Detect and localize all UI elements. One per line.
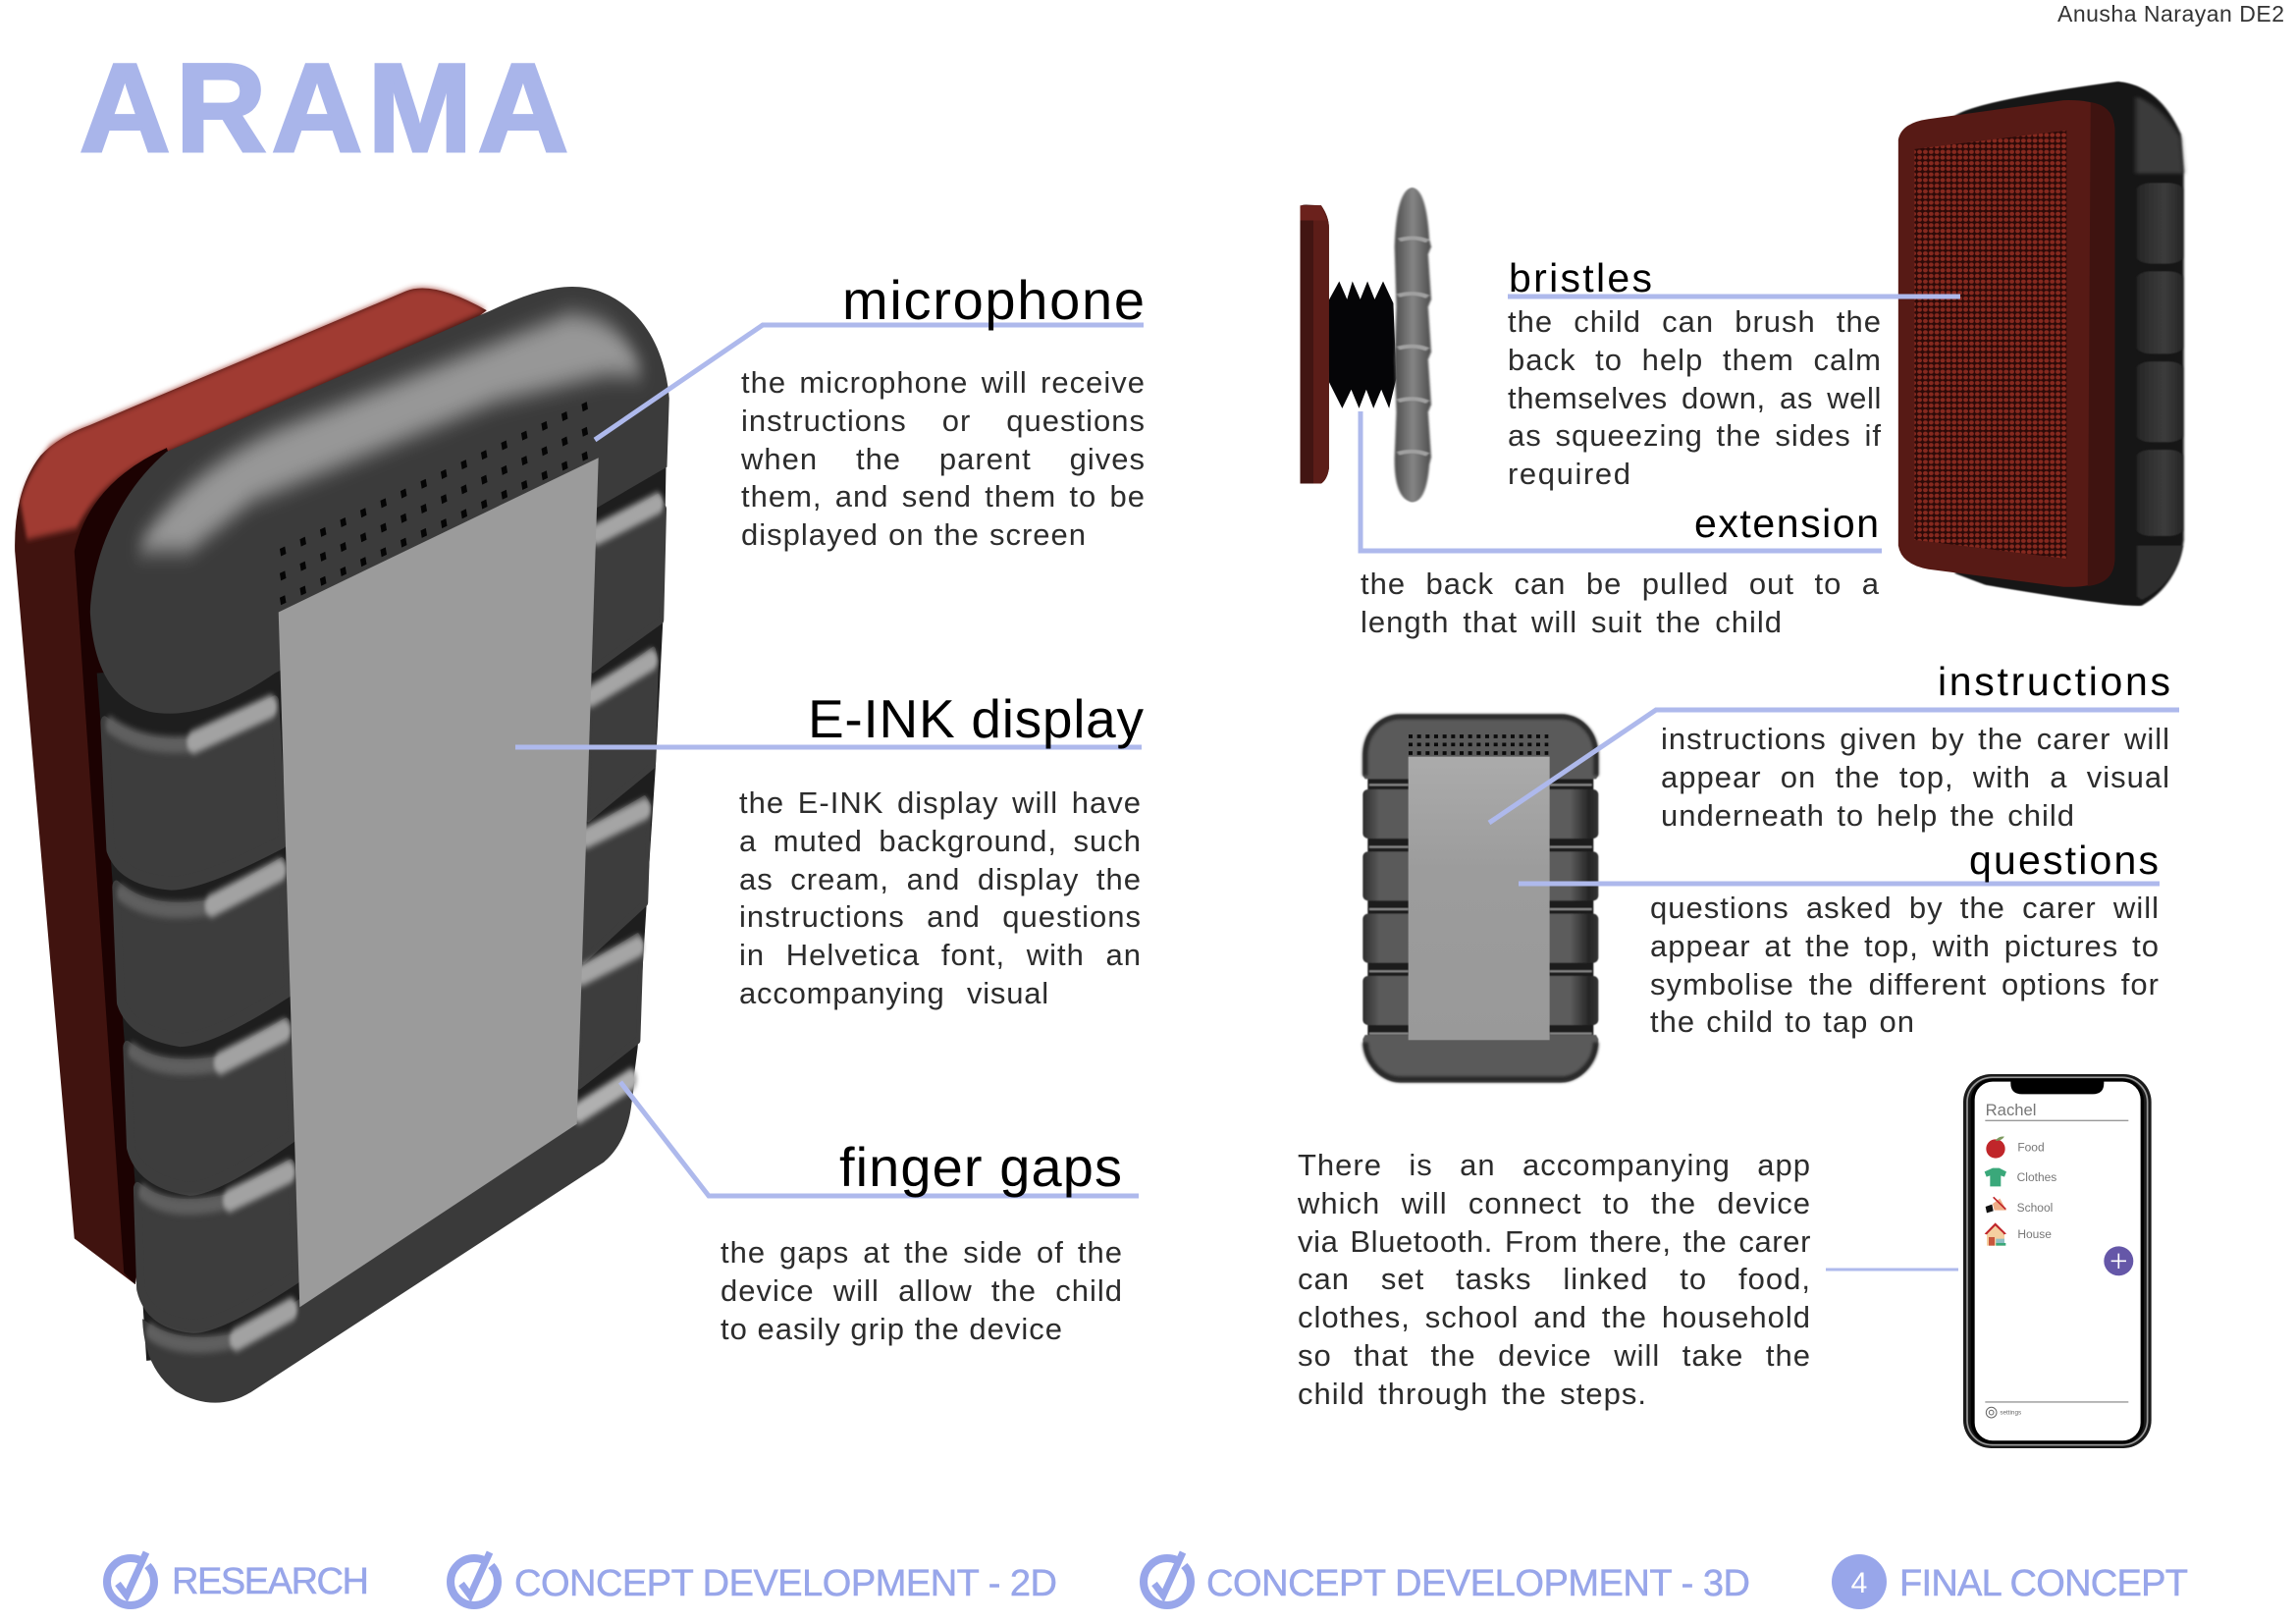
text block: microphone: them, and send them to be	[741, 479, 1146, 514]
callout line: extension	[1361, 411, 1882, 551]
callout line: bristles	[1508, 295, 1960, 298]
text block: finger gaps: the gaps at the side of the	[721, 1235, 1123, 1270]
text block: companion app: via Bluetooth. From there, the carer	[1298, 1224, 1811, 1259]
device render: exploded side view	[1300, 188, 1431, 503]
heading: finger gaps: finger gaps	[839, 1136, 1122, 1198]
front body edge	[1395, 188, 1431, 503]
phone frame	[1963, 1074, 2152, 1448]
icon: apple	[1986, 1136, 2005, 1159]
food label: Food	[2017, 1141, 2045, 1155]
top cap	[90, 287, 669, 714]
callout line: E-INK display	[515, 744, 1142, 750]
footer step: concept development 3D	[1144, 1549, 1750, 1605]
text block: instructions	[1661, 722, 2170, 833]
text block: E-INK display: a muted background, such	[739, 824, 1142, 858]
text block: companion app	[1298, 1148, 1811, 1411]
text block: companion app: can set tasks linked to food,	[1298, 1262, 1811, 1296]
text block: instructions: instructions given by the carer will	[1661, 722, 2170, 756]
text block: companion app: which will connect to the device	[1298, 1186, 1811, 1220]
text block: microphone: the microphone will receive	[741, 365, 1146, 400]
text block: finger gaps: to easily grip the device	[721, 1312, 1063, 1346]
icon: completed check	[107, 1549, 154, 1605]
text block: bristles: the child can brush the	[1508, 304, 1882, 339]
text block: extension: the back can be pulled out to a	[1361, 567, 1880, 601]
title: ARAMA	[80, 38, 568, 179]
text block: bristles: required	[1508, 457, 1632, 491]
left grips	[105, 702, 283, 884]
heading: bristles: bristles	[1509, 255, 1652, 300]
icon: hand writing	[1986, 1197, 2006, 1213]
text block: instructions: underneath to help the child	[1661, 798, 2075, 833]
text block: instructions: appear on the top, with a visual	[1661, 760, 2170, 794]
footer step: research: RESEARCH	[172, 1561, 369, 1602]
settings row	[1986, 1407, 2021, 1418]
E-INK screen	[279, 458, 599, 1307]
text block: E-INK display: the E-INK display will have	[739, 785, 1142, 820]
app phone mockup	[1963, 1074, 2152, 1448]
icon: house	[1985, 1222, 2006, 1246]
app user name: Rachel	[1986, 1101, 2037, 1119]
icon: t-shirt	[1985, 1168, 2006, 1186]
icon: completed check	[451, 1549, 498, 1605]
heading: instructions: instructions	[1938, 659, 2170, 704]
heading: E-INK display: E-INK display	[808, 688, 1145, 749]
author credit: Anusha Narayan DE2	[2057, 1, 2284, 27]
text block: questions: questions asked by the carer will	[1650, 891, 2160, 925]
text block: microphone	[741, 365, 1146, 552]
text block: E-INK display: accompanying visual	[739, 976, 1049, 1010]
footer step: research	[107, 1549, 369, 1605]
settings row: settings	[2000, 1410, 2021, 1417]
house label: House	[2017, 1227, 2052, 1241]
bottom cap	[142, 1074, 634, 1403]
icon: step number 4: 4	[1851, 1567, 1867, 1599]
callout line: questions	[1519, 882, 2160, 886]
text block: bristles: back to help them calm	[1508, 343, 1882, 377]
school label: School	[2017, 1201, 2053, 1215]
back plate edge	[1300, 204, 1329, 483]
text block: questions: the child to tap on	[1650, 1004, 1915, 1039]
bellows extension	[1327, 282, 1396, 408]
text block: bristles: themselves down, as well	[1508, 381, 1882, 415]
footer step: concept development 2D	[451, 1549, 1057, 1605]
callout line: finger gaps	[620, 1082, 1139, 1196]
grip body	[1362, 714, 1598, 1083]
device render: flat front view	[1362, 714, 1598, 1083]
dark rubber body	[90, 287, 669, 1403]
icon: completed check	[1144, 1549, 1191, 1605]
footer step: concept development 3D: CONCEPT DEVELOPMENT - 3D	[1206, 1563, 1750, 1604]
red back plate	[15, 288, 487, 1284]
red plate	[1898, 100, 2114, 587]
text block: E-INK display	[739, 785, 1142, 1010]
text block: finger gaps	[721, 1235, 1123, 1346]
text block: E-INK display: as cream, and display the	[739, 862, 1142, 896]
text block: E-INK display: in Helvetica font, with an	[739, 938, 1142, 972]
microphone holes	[1409, 736, 1548, 753]
text block: questions	[1650, 891, 2160, 1039]
text block: bristles: as squeezing the sides if	[1508, 418, 1882, 453]
callout line: microphone	[595, 325, 1144, 440]
text block: extension	[1361, 567, 1880, 639]
footer step: final concept: FINAL CONCEPT	[1899, 1563, 2188, 1604]
text block: microphone: displayed on the screen	[741, 517, 1087, 552]
text block: finger gaps: device will allow the child	[721, 1273, 1123, 1308]
text block: E-INK display: instructions and questions	[739, 899, 1142, 934]
text block: microphone: when the parent gives	[741, 442, 1146, 476]
footer step: final concept	[1832, 1554, 2188, 1609]
grip highlights	[110, 504, 657, 1345]
callout line: instructions	[1489, 710, 2179, 823]
device render: angled front view	[15, 287, 669, 1403]
callout line: app	[1826, 1269, 1958, 1271]
text block: questions: symbolise the different options for	[1650, 967, 2160, 1001]
text block: companion app: so that the device will take the	[1298, 1338, 1811, 1373]
device render: back view with bristles	[1898, 81, 2184, 606]
heading: extension: extension	[1694, 501, 1879, 546]
text block: companion app: child through the steps.	[1298, 1377, 1647, 1411]
right grips	[593, 498, 665, 670]
screen	[1409, 757, 1550, 1040]
icon: step number 4	[1832, 1554, 1887, 1609]
add button	[2104, 1246, 2133, 1275]
footer step: concept development 2D: CONCEPT DEVELOPMENT - 2D	[514, 1563, 1057, 1604]
heading: questions: questions	[1969, 838, 2159, 883]
clothes label: Clothes	[2017, 1170, 2056, 1184]
shadow gaps between grips	[97, 463, 667, 1361]
heading: microphone: microphone	[842, 269, 1145, 331]
text block: microphone: instructions or questions	[741, 404, 1146, 438]
text block: companion app: clothes, school and the household	[1298, 1300, 1811, 1334]
bristle field	[1914, 131, 2066, 559]
rubber body behind	[1955, 81, 2184, 606]
text block: bristles	[1508, 304, 1882, 491]
microphone holes	[281, 401, 598, 602]
text block: questions: appear at the top, with pictures to	[1650, 929, 2160, 963]
text block: extension: length that will suit the child	[1361, 605, 1783, 639]
text block: companion app: There is an accompanying app	[1298, 1148, 1811, 1182]
